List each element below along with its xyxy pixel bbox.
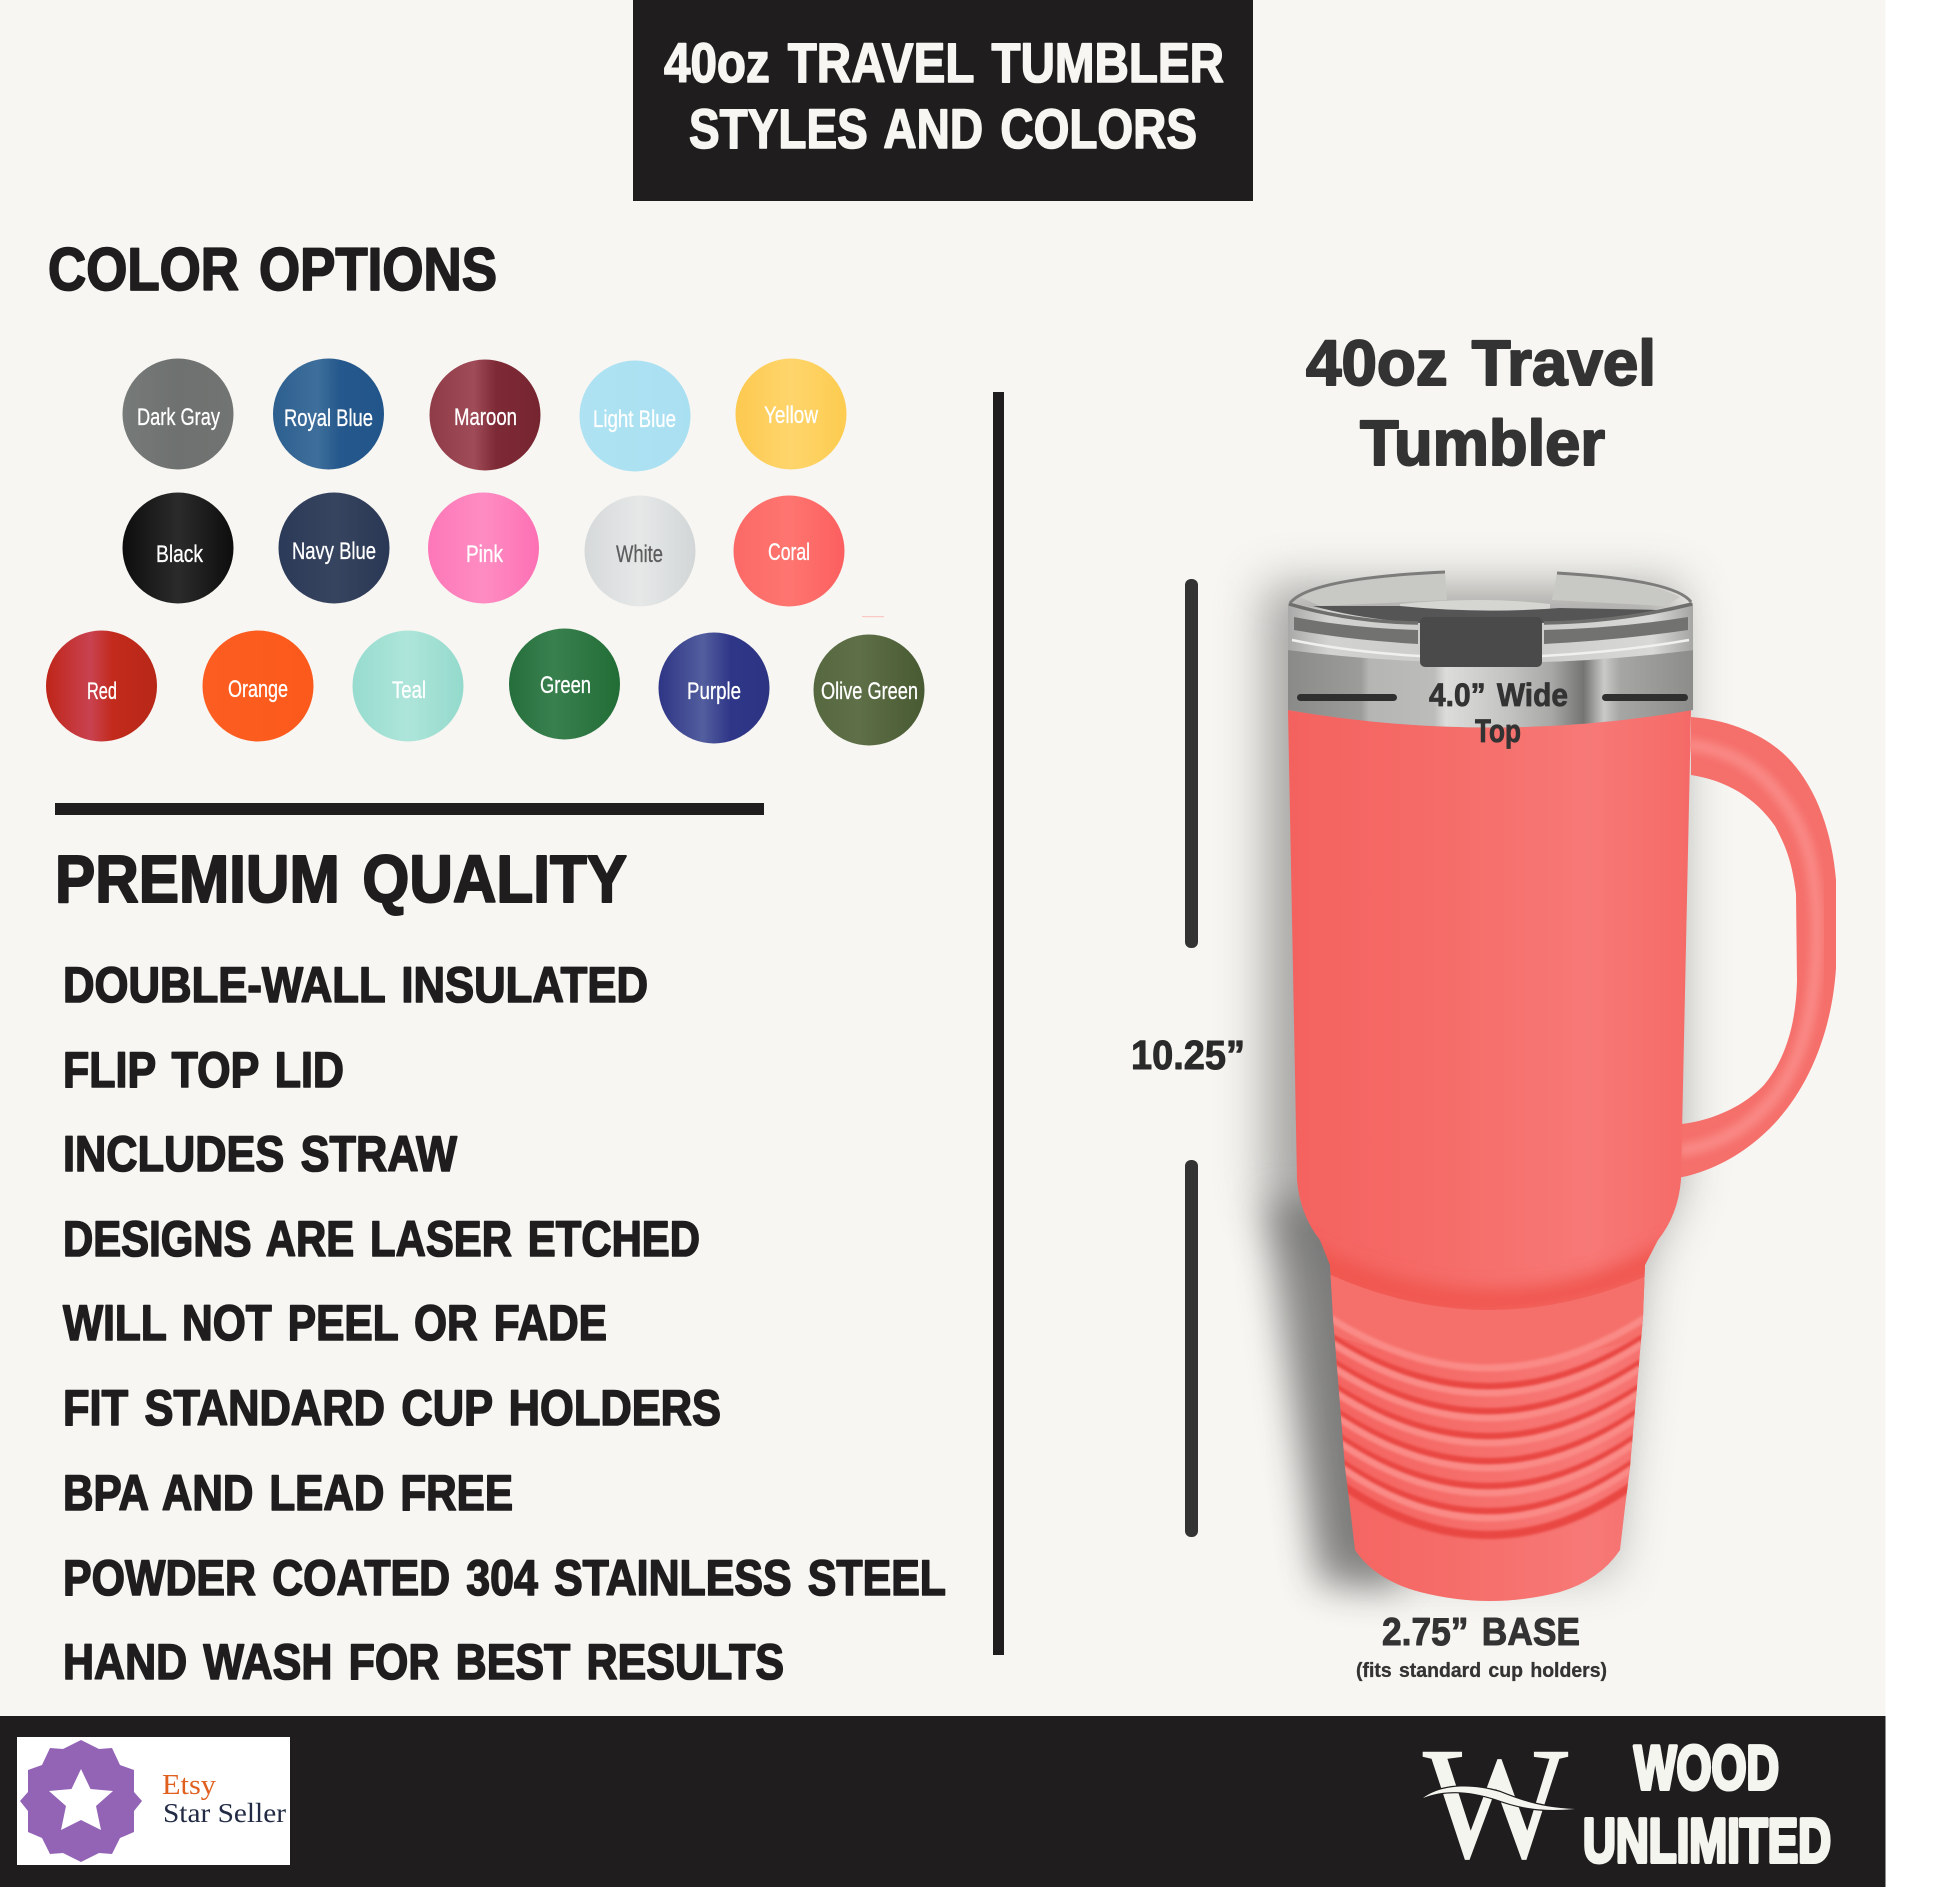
swatch: black [122,492,234,604]
swatch: royal blue [273,358,384,470]
product title [1306,327,1656,479]
swatch: yellow [736,358,846,470]
wood unlimited logo [1423,1714,1831,1888]
swatch: maroon: Maroon [454,404,517,431]
swatch: white: White [616,541,663,568]
height annotation: 10.25” [1131,1032,1245,1078]
icon: purple star badge [20,1740,142,1862]
swatch: coral [734,496,844,606]
feature list [63,957,946,1690]
feature list: BPA AND LEAD FREE [63,1465,513,1521]
swatch: red: Red [87,678,117,705]
tumbler lid [1288,572,1693,667]
base annotation: 2.75” BASE [1382,1611,1580,1654]
swatch: navy blue [278,492,390,604]
rib highlights [1330,1318,1645,1518]
swatch: coral: Coral [768,539,810,566]
swatch: pink [428,492,539,604]
swatch: dark gray [122,358,234,470]
width annotation: Top [1475,713,1521,749]
feature list: HAND WASH FOR BEST RESULTS [63,1634,784,1690]
swatch: orange [202,630,314,742]
title banner [633,0,1253,201]
title banner: STYLES AND COLORS [689,97,1197,160]
wood unlimited logo: UNLIMITED [1583,1807,1831,1876]
swatch: navy blue: Navy Blue [292,538,376,565]
swatch: purple: Purple [687,678,741,705]
width annotation [1297,677,1688,749]
feature list: POWDER COATED 304 STAINLESS STEEL [63,1550,946,1606]
color swatches [46,358,924,746]
heading: premium quality: PREMIUM QUALITY [55,842,627,917]
logo mark: W with swoosh: W [1423,1714,1568,1888]
footer bar [0,1716,1886,1887]
swatch: light blue [580,360,690,472]
product title: Tumbler [1360,407,1605,479]
swatch: yellow: Yellow [764,402,819,429]
swatch: olive green [814,634,924,746]
swatch: olive green: Olive Green [821,678,918,705]
etsy star seller badge: Etsy [162,1769,217,1801]
wood unlimited logo: WOOD [1634,1734,1779,1803]
title banner: 40oz TRAVEL TUMBLER [664,31,1224,94]
tumbler base and ribs [1300,1240,1670,1535]
rib shadows [1330,1337,1645,1535]
feature list: FIT STANDARD CUP HOLDERS [63,1380,721,1436]
swatch: dark gray: Dark Gray [137,404,220,431]
swatch: orange: Orange [228,676,288,703]
swatch: teal: Teal [392,677,426,704]
feature list: INCLUDES STRAW [63,1126,458,1182]
etsy star seller badge [17,1737,290,1865]
feature list: WILL NOT PEEL OR FADE [63,1295,607,1351]
tumbler illustration [1288,572,1836,1601]
tumbler steel band [1288,650,1693,728]
swatch: teal [352,630,464,742]
heading: color options: COLOR OPTIONS [48,236,497,303]
swatch: royal blue: Royal Blue [284,405,373,432]
swatch: white [584,496,696,606]
swatch: green: Green [540,672,591,699]
swatch: purple [658,632,770,744]
swatch: red [46,630,157,742]
swatch: black: Black [156,541,204,568]
feature list: DOUBLE-WALL INSULATED [63,957,648,1013]
swatch: green [509,628,620,740]
tumbler shadow [1265,585,1680,1590]
height annotation [1131,579,1245,1537]
tumbler body [1288,710,1691,1601]
swatch: pink: Pink [466,541,504,568]
tumbler handle [1678,717,1836,1178]
product title: 40oz Travel [1306,327,1656,399]
base annotation: (fits standard cup holders) [1356,1660,1607,1682]
etsy star seller badge: Star Seller [163,1798,286,1828]
swatch: light blue: Light Blue [593,406,676,433]
feature list: FLIP TOP LID [63,1042,344,1098]
swatch: maroon [430,360,540,470]
width annotation: 4.0” Wide [1429,677,1568,713]
feature list: DESIGNS ARE LASER ETCHED [63,1211,700,1267]
base annotation [1356,1611,1607,1682]
